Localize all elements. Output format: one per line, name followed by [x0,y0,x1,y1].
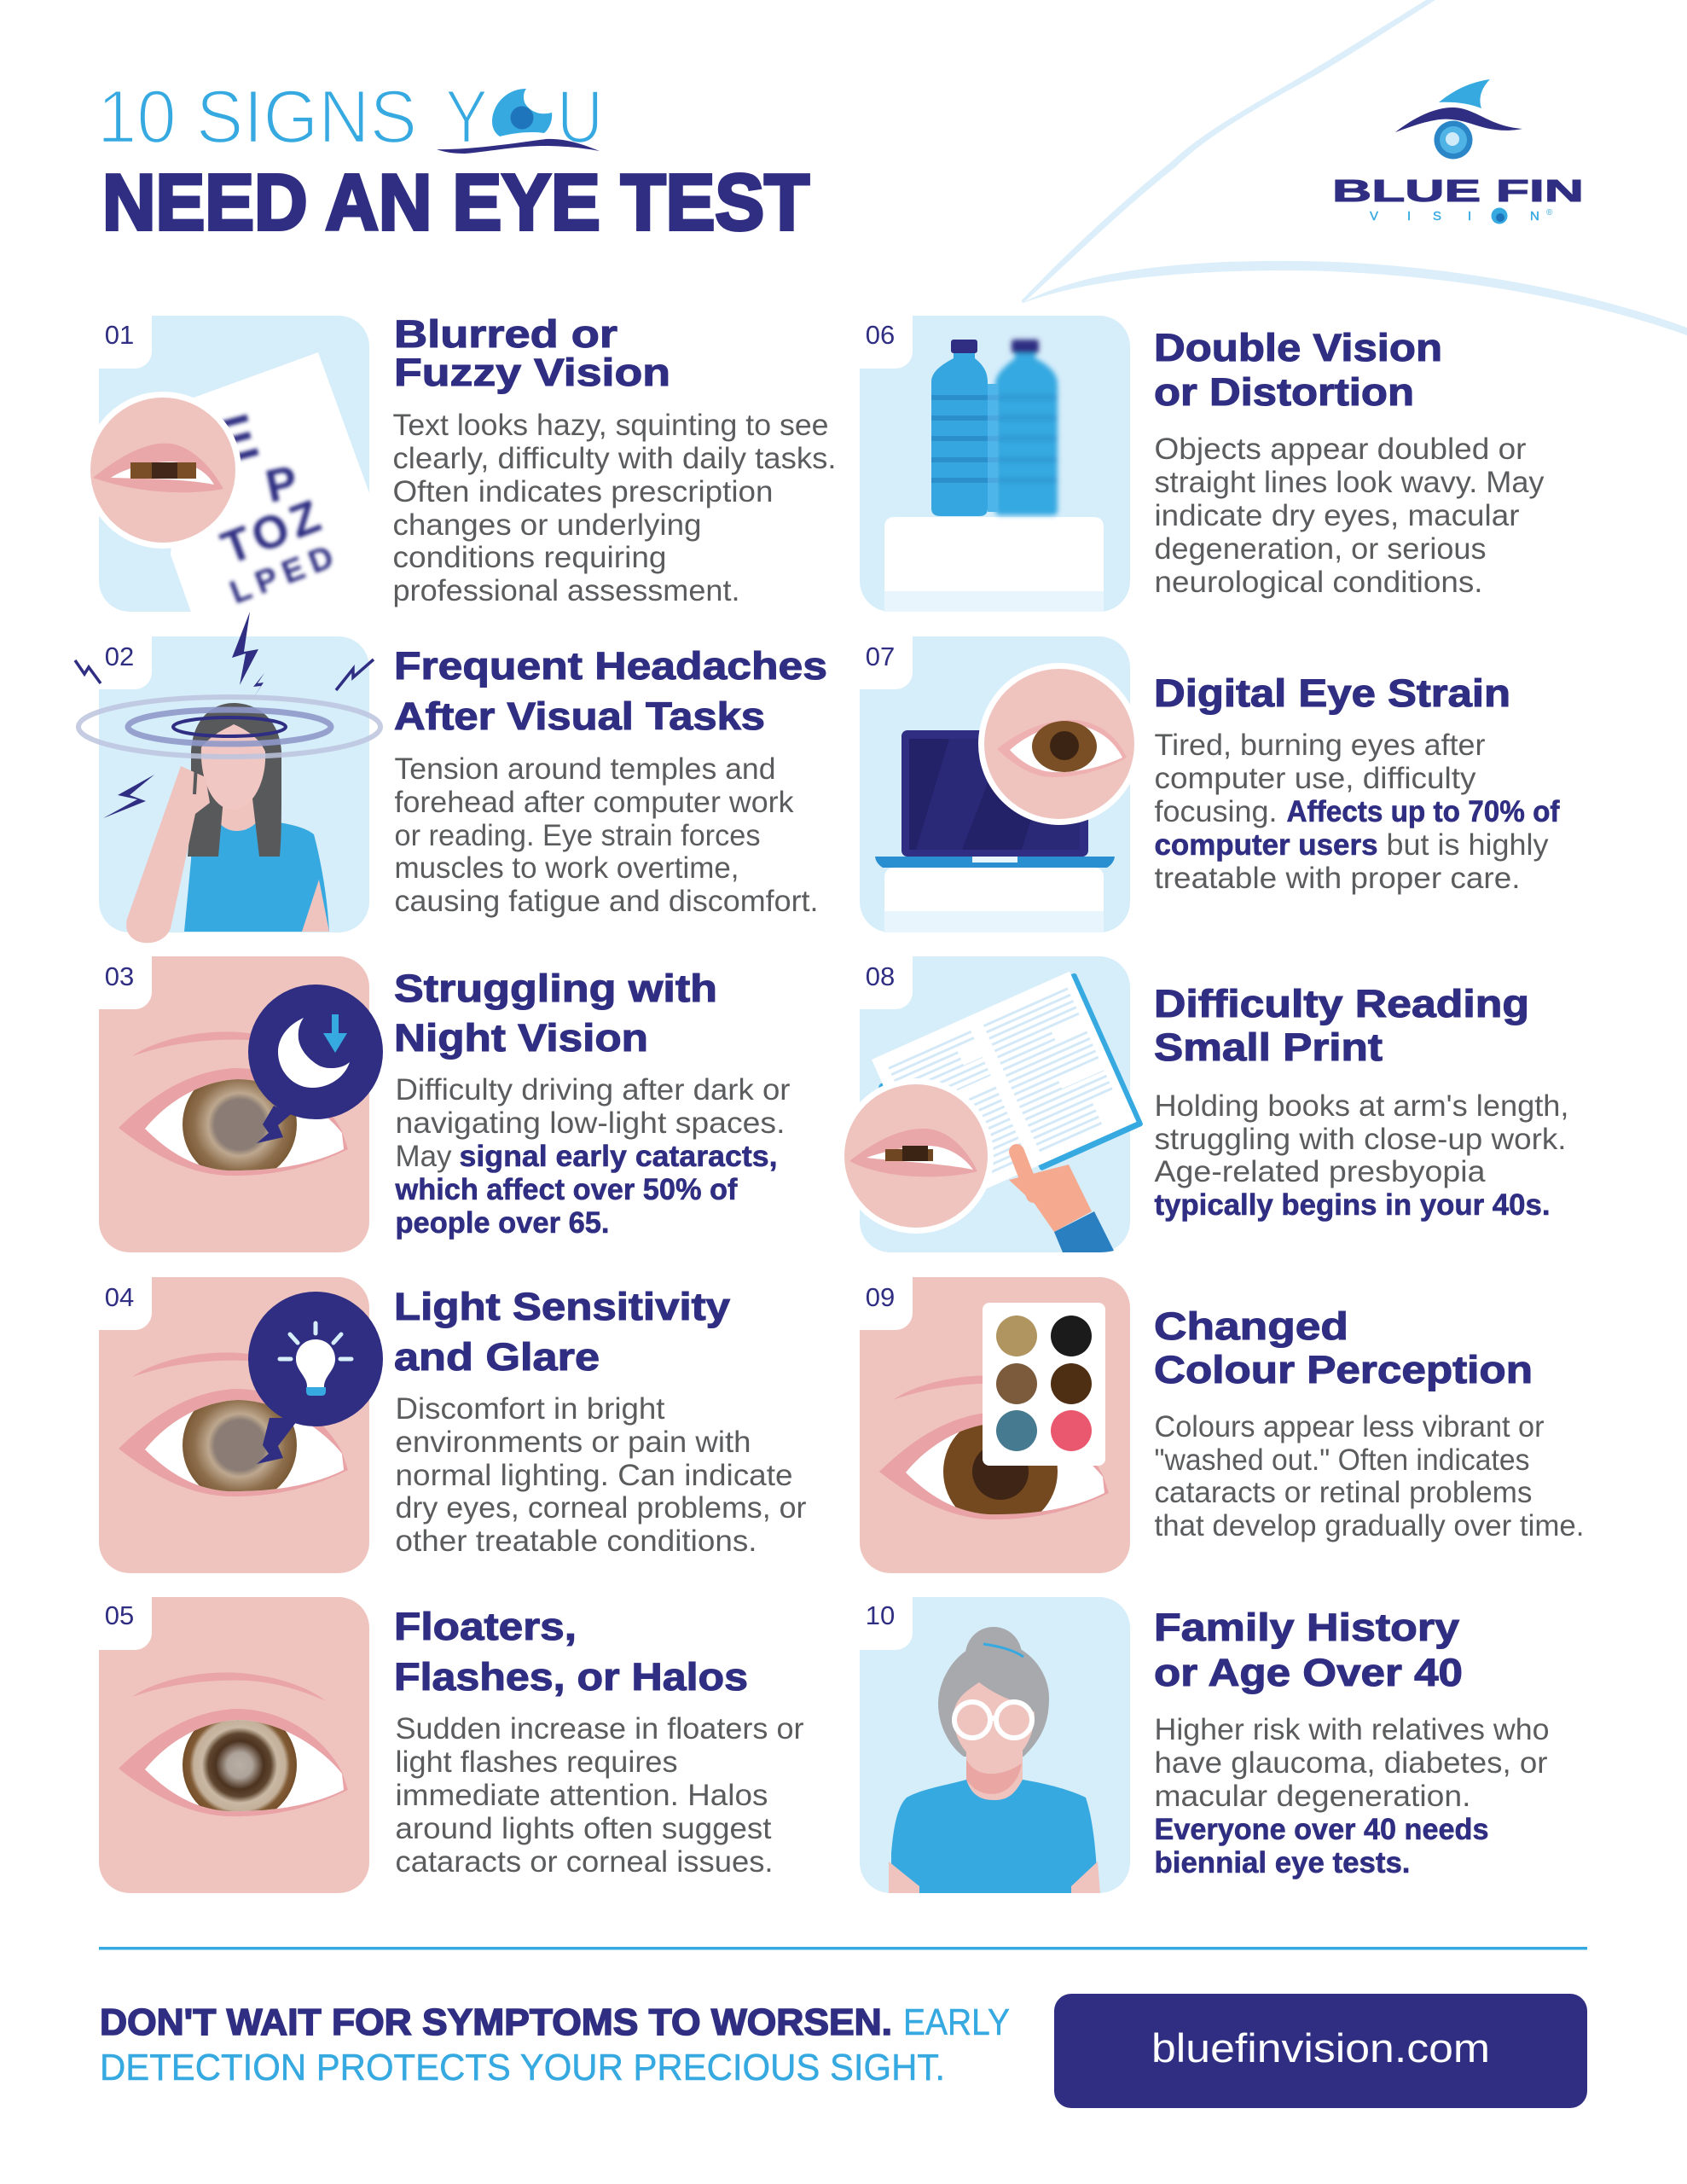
illustration 05: eye with halo ring [99,1597,369,1893]
heading 07: Digital Eye Strain [1154,671,1510,715]
logo: Blue Fin Vision: BLUE FIN [1332,173,1584,208]
body text 01: Text looks hazy, squinting to see [392,409,829,442]
number 03: 03 [105,961,134,991]
body text 07 [1155,729,1560,895]
colour swatches [996,1316,1092,1451]
body text 03: Difficulty driving after dark or [396,1073,791,1107]
heading 02: After Visual Tasks [394,694,765,738]
heading 03: Struggling with [394,967,717,1010]
body text 04: normal lighting. Can indicate [396,1459,793,1492]
body text 02: causing fatigue and discomfort. [394,885,819,918]
body text 10 [1155,1713,1549,1879]
card 04: light sensitivity [99,1277,807,1573]
decorative swoosh background [1021,0,1687,335]
body text 03 [395,1073,791,1240]
illustration 01: eye chart with squinting eye: P [261,456,302,513]
illustration 01: eye chart with squinting eye: TOZ [215,491,327,574]
number 08: 08 [866,961,895,991]
title: 10 signs you need an eye test: 10 SIGNS [97,74,417,159]
body text 05 [396,1712,804,1879]
body text 10: have glaucoma, diabetes, or [1155,1746,1548,1780]
heading 10: or Age Over 40 [1154,1651,1463,1694]
heading 04: Light Sensitivity [394,1285,730,1328]
heading 08: Small Print [1154,1025,1383,1069]
body text 03: which affect over 50% of [395,1173,738,1206]
body text 02: muscles to work overtime, [394,851,739,885]
website button [1054,1994,1587,2108]
heading 03 [394,967,717,1060]
number 01: 01 [105,320,134,350]
body text 03: signal early cataracts, [459,1140,778,1173]
call to action text: DETECTION PROTECTS YOUR PRECIOUS SIGHT. [100,2047,945,2088]
heading 03: Night Vision [394,1016,648,1060]
heading 04: and Glare [394,1335,600,1379]
illustration 01: eye chart with squinting eye: E [207,402,264,478]
heading 05: Flashes, or Halos [394,1655,748,1699]
illustration 04: eye with light bulb bubble [99,1277,383,1573]
card 02: frequent headaches [75,612,827,943]
body text 09: "washed out." Often indicates [1155,1443,1530,1477]
illustration 01: eye chart with squinting eye [84,316,380,631]
number 05: 05 [105,1600,134,1630]
body text 08: typically begins in your 40s. [1155,1188,1551,1222]
card 10: family history [860,1597,1549,1893]
body text 04 [396,1392,807,1558]
body text 08: Age-related presbyopia [1155,1155,1486,1188]
heading 05 [394,1605,748,1699]
body text 09: Colours appear less vibrant or [1155,1410,1545,1443]
heading 10: Family History [1154,1606,1459,1649]
illustration 06: water bottles on table [860,316,1130,612]
number 10: 10 [866,1600,895,1630]
body text 09: cataracts or retinal problems [1155,1476,1532,1509]
body text 06: indicate dry eyes, macular [1155,499,1520,532]
body text 01: conditions requiring [392,541,667,574]
number 07: 07 [866,642,895,671]
illustration 10: older woman with glasses [860,1597,1130,1893]
call to action text [100,2001,1010,2088]
body text 04: other treatable conditions. [396,1525,757,1558]
body text 06: neurological conditions. [1155,566,1482,599]
body text 01 [392,409,836,607]
card 06: double vision [860,316,1545,612]
heading 08 [1154,982,1529,1069]
body text 03: navigating low-light spaces. [396,1107,785,1140]
body text 07: computer users [1155,828,1378,862]
number 06: 06 [866,320,895,350]
body text 08: Holding books at arm's length, [1155,1089,1569,1123]
body text 07: treatable with proper care. [1155,862,1520,895]
card 08: small print [838,956,1569,1252]
body text 01: clearly, difficulty with daily tasks. [392,442,836,475]
body text 05: Sudden increase in floaters or [396,1712,804,1745]
body text 05: immediate attention. Halos [396,1779,768,1812]
body text 02: Tension around temples and [394,752,776,786]
number 02: 02 [105,642,134,671]
body text 04: Discomfort in bright [396,1392,665,1426]
card 07: digital eye strain [860,636,1560,932]
heading 10 [1154,1606,1463,1694]
body text 02 [394,752,819,918]
heading 05: Floaters, [394,1605,577,1648]
heading 09 [1154,1304,1533,1391]
heading 09: Colour Perception [1154,1348,1533,1391]
body text 04: dry eyes, corneal problems, or [396,1491,807,1525]
illustration 09: eye with colour swatch card [860,1277,1130,1573]
heading 02 [394,644,827,738]
heading 06: or Distortion [1154,370,1414,414]
title: 10 signs you need an eye test: Y [445,74,488,159]
heading 01: Fuzzy Vision [394,351,670,394]
body text 10: macular degeneration. [1155,1780,1470,1813]
body text 05: light flashes requires [396,1745,677,1779]
body text 01: changes or underlying [392,508,701,542]
title: 10 signs you need an eye test: U [557,74,603,159]
number 04: 04 [105,1282,134,1312]
body text 06: straight lines look wavy. May [1155,466,1545,499]
body text 09 [1155,1410,1585,1542]
card 03: night vision [99,956,791,1252]
body text 04: environments or pain with [396,1426,751,1459]
illustration 03: eye with moon bubble [99,956,383,1252]
heading 09: Changed [1154,1304,1348,1348]
body text 01: Often indicates prescription [392,475,773,508]
body text 06: degeneration, or serious [1155,532,1486,566]
body text 02: forehead after computer work [394,786,794,819]
body text 10: Everyone over 40 needs [1155,1813,1489,1846]
card 01: blurred or fuzzy vision [84,312,836,631]
title: 10 signs you need an eye test: NEED AN EYE TEST [102,158,809,247]
illustration 01: eye chart with squinting eye: LPED [225,539,339,611]
body text 01: professional assessment. [392,574,740,607]
body text 03: people over 65. [396,1206,609,1240]
body text 07: Tired, burning eyes after [1155,729,1486,762]
body text 08: struggling with close-up work. [1155,1123,1566,1156]
website button: bluefinvision.com [1151,2025,1490,2071]
heading 02: Frequent Headaches [394,644,827,688]
card 09: colour perception [860,1277,1585,1573]
illustration 07: laptop with tired eye [860,636,1140,932]
body text 06 [1155,433,1545,599]
body text 07: computer use, difficulty [1155,762,1476,795]
logo: Blue Fin Vision: ® [1546,208,1553,218]
body text 07: focusing. [1155,795,1278,828]
illustration 02: woman with headache [75,612,380,943]
call to action text: EARLY [903,2001,1010,2043]
title: 10 signs you need an eye test [97,74,809,247]
call to action text: DON'T WAIT FOR SYMPTOMS TO WORSEN. [100,2001,892,2043]
heading 01 [394,312,670,394]
heading 08: Difficulty Reading [1154,982,1529,1025]
body text 10: Higher risk with relatives who [1155,1713,1549,1746]
logo: Blue Fin Vision [1332,79,1584,224]
number 09: 09 [866,1282,895,1312]
body text 09: that develop gradually over time. [1155,1509,1585,1542]
body text 08 [1155,1089,1569,1222]
body text 03: May [396,1140,452,1173]
heading 06 [1154,326,1442,414]
heading 06: Double Vision [1154,326,1442,369]
body text 05: cataracts or corneal issues. [396,1845,773,1879]
logo: Blue Fin Vision: VISION [1370,209,1539,224]
heading 04 [394,1285,730,1379]
heading 01: Blurred or [394,312,617,356]
body text 05: around lights often suggest [396,1812,772,1845]
illustration 08: book, hand and squinting eye [838,956,1144,1252]
body text 02: or reading. Eye strain forces [394,819,761,852]
card 05: floaters, flashes, halos [99,1597,804,1893]
body text 06: Objects appear doubled or [1155,433,1527,466]
body text 07: but is highly [1387,828,1549,862]
body text 07: Affects up to 70% of [1286,795,1560,828]
body text 10: biennial eye tests. [1155,1846,1411,1879]
